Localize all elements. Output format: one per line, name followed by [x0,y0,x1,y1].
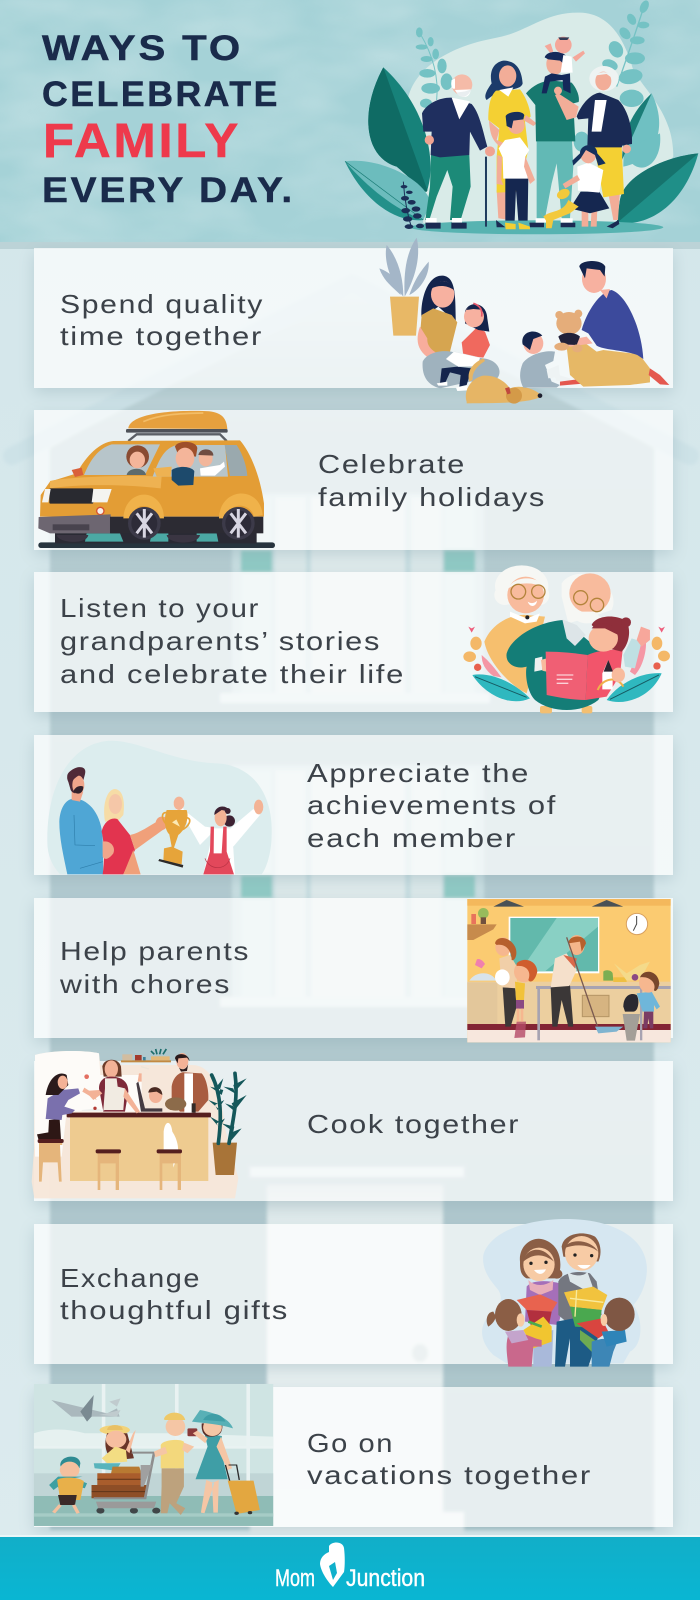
girl in sun hat on cart [94,1425,136,1471]
text: appreciate the achievements [307,758,557,853]
text: cook together: Cook together [307,1109,520,1139]
title: FAMILY [43,115,241,168]
text: go on vacations together: Go on [307,1428,394,1458]
text: exchange thoughtful gifts: Exchange [60,1263,201,1293]
text: spend quality time together: Spend quality [60,289,264,319]
illustration: family cooking at counter [32,1049,247,1198]
title: EVERY DAY. [42,171,295,210]
panel: go on vacations together [34,1384,673,1527]
suitcase [225,1465,260,1515]
illustration: family at airport with luggage [34,1384,273,1526]
text: appreciate the achievements: Appreciate the [307,758,530,788]
text: spend quality time together [60,289,264,351]
text: listen to grandparents' stories: and celebrate their life [60,659,405,689]
text: listen to grandparents' stories: grandparents’ stories [60,626,381,656]
text: celebrate family holidays: family holidays [318,482,546,512]
illustration: parents and children exchanging gifts [482,1219,647,1367]
logo: MomJunction: Junction [346,1565,425,1592]
father in yellow cap [154,1413,197,1515]
panel: help parents with chores [34,898,673,1042]
illustration: parents playing with children [379,238,669,406]
text: go on vacations together: vacations together [307,1460,592,1490]
panel: spend quality time together [34,238,673,406]
father with baby on shoulders [526,37,585,227]
text: go on vacations together [307,1428,592,1490]
illustration: kitchen chores scene [467,899,671,1042]
logo: MomJunction: Mom [275,1565,315,1592]
text: celebrate family holidays [318,449,546,512]
illustration: family in orange car [38,411,275,548]
panel: exchange thoughtful gifts [34,1219,673,1367]
mother [485,61,537,227]
boy in teal cap [49,1457,87,1513]
title: WAYS TO [42,29,243,68]
text: spend quality time together: time together [60,321,263,351]
luggage cart [92,1453,167,1514]
grandfather [422,74,495,229]
illustration: grandparents reading with granddaughter [463,565,670,713]
illustration: extended family among leaves [345,0,698,234]
panel: celebrate family holidays [34,410,673,550]
text: appreciate the achievements: each member [307,823,517,853]
text: listen to grandparents' stories [60,593,405,689]
grandmother [577,66,632,228]
text: help parents with chores [59,936,250,999]
illustration: family holding trophy [47,741,272,874]
panel: listen to grandparents' stories [34,565,673,713]
girl with dog [538,145,609,228]
panel: cook together [32,1049,673,1201]
text: celebrate family holidays: Celebrate [318,449,466,479]
logo: MomJunction [275,1542,425,1592]
panel: appreciate achievements [34,735,673,875]
text: exchange thoughtful gifts: thoughtful gifts [60,1295,289,1325]
header band [0,0,700,249]
title [42,29,295,210]
text: help parents with chores: with chores [59,969,231,999]
boy [497,112,535,229]
title: CELEBRATE [42,75,280,114]
footer band [0,1535,700,1600]
text: listen to grandparents' stories: Listen to your [60,593,260,623]
text: help parents with chores: Help parents [60,936,250,966]
text: exchange thoughtful gifts [60,1263,289,1325]
mother in teal dress [192,1410,233,1513]
text: appreciate the achievements: achievements of [307,790,557,820]
